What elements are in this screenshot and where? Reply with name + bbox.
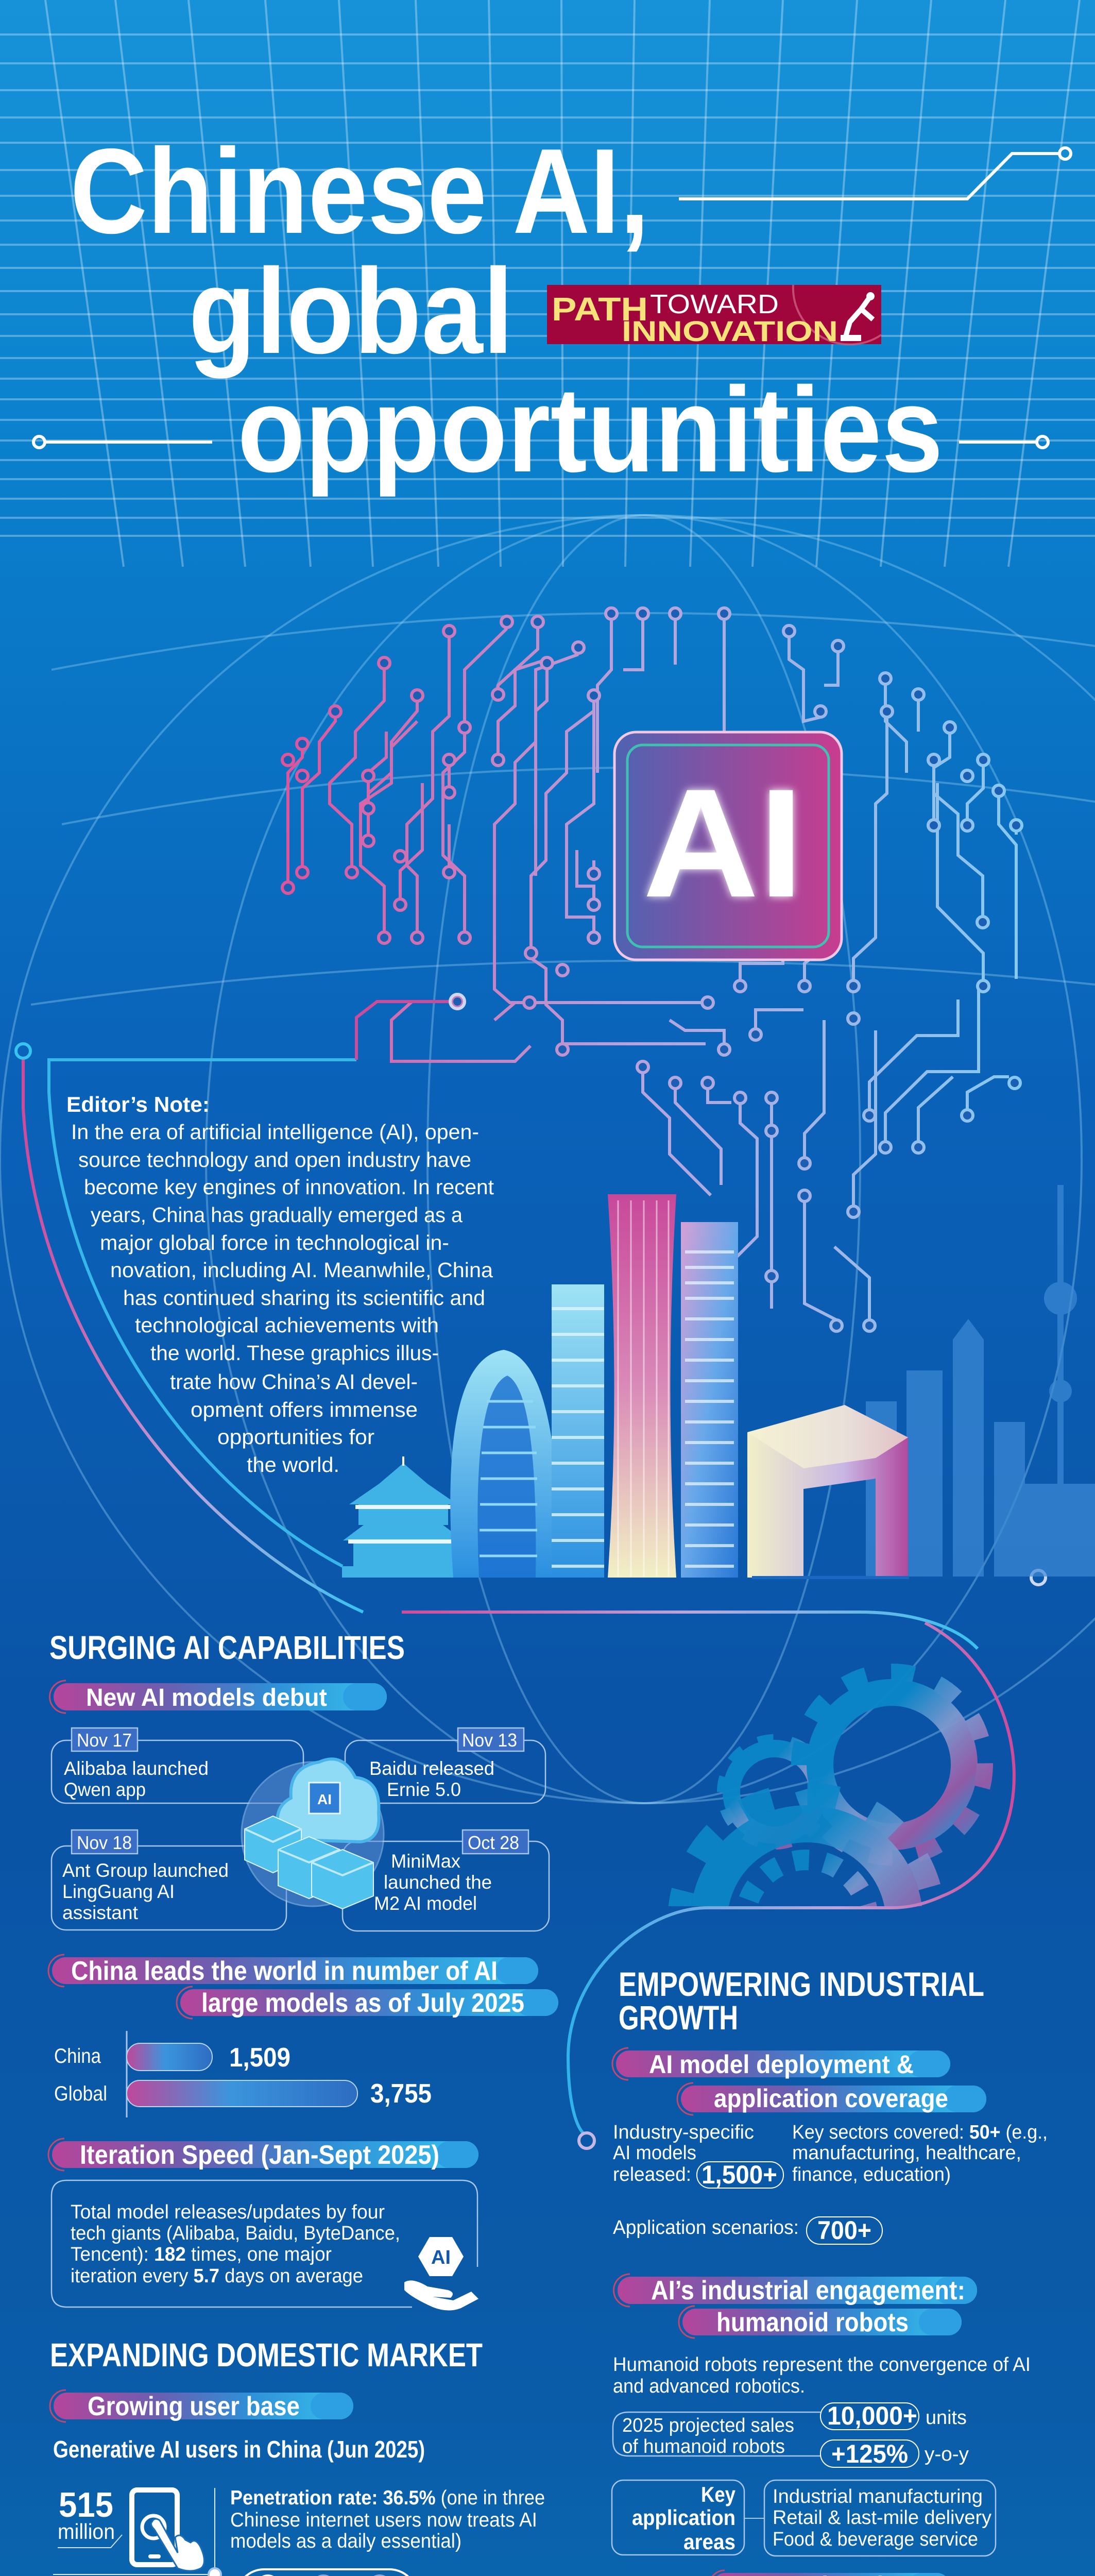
editor's note: major global force in technological in- <box>100 1231 449 1255</box>
pill: AI market size <box>709 2570 950 2576</box>
card: Nov 13 Baidu <box>345 1728 545 1803</box>
editor's note: trate how China’s AI devel- <box>170 1370 418 1394</box>
illustration: AI cloud and servers <box>242 1759 384 1909</box>
stat: penetration rate: Chinese internet users now treats AI <box>230 2509 537 2531</box>
icon: one in three people <box>236 2569 417 2576</box>
key application areas: areas <box>683 2530 735 2554</box>
stat: 2025 projected humanoid robot sales: 2025 projected sales <box>622 2415 794 2436</box>
bar chart: China vs Global large models: Global <box>54 2082 107 2105</box>
editor's note: novation, including AI. Meanwhile, China <box>110 1258 493 1282</box>
key application areas: Food & beverage service <box>773 2529 978 2550</box>
stat: 2025 projected humanoid robot sales <box>613 2401 969 2468</box>
stat: 515 million users <box>58 2485 122 2548</box>
editor's note <box>66 1092 494 1477</box>
stat: industry-specific models: released: <box>613 2164 691 2185</box>
card: Oct 28 MiniMax <box>343 1830 549 1931</box>
card: iteration speed details: Total model releases/updates by four <box>71 2201 385 2223</box>
pill: China leads the world: China leads the world in number of AI <box>71 1956 498 1986</box>
stat: 2025 projected humanoid robot sales: units <box>926 2407 967 2429</box>
stat: industry-specific models: AI models <box>613 2142 696 2164</box>
card: Nov 18 Ant Group: assistant <box>62 1902 139 1923</box>
heading: surging AI capabilities: SURGING AI CAPABILITIES <box>49 1629 405 1666</box>
bar chart: China vs Global large models <box>54 2031 432 2117</box>
pill: iteration speed: Iteration Speed (Jan-Sept 2025) <box>80 2140 439 2170</box>
pill: AI's industrial engagement: AI’s industrial engagement: <box>651 2276 965 2306</box>
editor's note: become key engines of innovation. In recent <box>84 1175 494 1199</box>
pill: growing user base: Growing user base <box>88 2392 300 2421</box>
heading: empowering industrial growth <box>619 1965 984 2037</box>
title <box>70 123 943 497</box>
key application areas: Key <box>701 2482 736 2506</box>
icon: AI in hand: AI <box>431 2247 451 2268</box>
editor's note: source technology and open industry have <box>78 1148 471 1172</box>
key application areas: Retail & last-mile delivery <box>773 2507 991 2529</box>
key application areas <box>612 2480 996 2556</box>
pill: humanoid robots: humanoid robots <box>716 2308 909 2337</box>
AI chip box: AI <box>643 756 803 929</box>
heading: expanding domestic market: EXPANDING DOMESTIC MARKET <box>50 2336 483 2374</box>
icon: AI in hand <box>404 2237 478 2311</box>
title: global <box>189 243 514 379</box>
stat: application scenarios: 700+ <box>817 2216 871 2245</box>
bar chart: China vs Global large models: 1,509 <box>229 2043 290 2073</box>
card: iteration speed details: iteration every 5.7 days on average <box>71 2265 363 2287</box>
stat: key sectors covered: finance, education) <box>792 2164 951 2185</box>
title circuit decorations <box>33 148 1071 448</box>
pill: new AI models debut: New AI models debut <box>86 1684 327 1711</box>
card: Nov 13 Baidu: Nov 13 <box>462 1730 517 1751</box>
stat: application scenarios: Application scenarios: <box>613 2217 799 2239</box>
stat: industry-specific models: 1,500+ <box>702 2160 777 2189</box>
icon: phone touch <box>132 2490 204 2571</box>
key application areas: Industrial manufacturing <box>773 2486 983 2507</box>
subheading: generative AI users: Generative AI users in China (Jun 2025) <box>53 2436 425 2463</box>
card: Nov 13 Baidu: Ernie 5.0 <box>387 1779 461 1800</box>
bar chart: China vs Global large models: China <box>54 2045 101 2067</box>
card: Nov 17 Alibaba: Qwen app <box>64 1779 146 1800</box>
card: Nov 17 Alibaba: Nov 17 <box>77 1730 132 1751</box>
editor's note: has continued sharing its scientific and <box>123 1286 485 1310</box>
editor's note: technological achievements with <box>135 1313 439 1337</box>
editor's note: the world. <box>247 1453 339 1477</box>
card: Nov 13 Baidu: Baidu released <box>369 1758 494 1779</box>
title: Chinese AI, <box>70 123 649 259</box>
stat: industry-specific models <box>613 2122 783 2189</box>
card: Oct 28 MiniMax: M2 AI model <box>374 1893 477 1914</box>
stat: industry-specific models: Industry-specific <box>613 2122 754 2143</box>
card: Nov 18 Ant Group: LingGuang AI <box>62 1881 175 1902</box>
bar chart: China vs Global large models: 3,755 <box>370 2079 432 2109</box>
stat: 2025 projected humanoid robot sales: y-o-y <box>925 2444 969 2465</box>
gears upper right <box>568 1623 1014 2148</box>
card: iteration speed details: Tencent): 182 times, one major <box>71 2244 332 2265</box>
badge: Path Toward Innovation: INNOVATION <box>622 315 838 347</box>
stat: 515 million users: 515 <box>59 2485 113 2524</box>
skyline illustration <box>342 1185 1095 1578</box>
stat: key sectors covered <box>792 2122 1048 2185</box>
card: Nov 18 Ant Group: Ant Group launched <box>62 1860 229 1881</box>
card: Nov 18 Ant Group <box>52 1830 286 1930</box>
stat: 2025 projected humanoid robot sales: 10,000+ <box>827 2401 917 2430</box>
editor's note: years, China has gradually emerged as a <box>91 1203 463 1227</box>
illustration: AI cloud and servers: AI <box>317 1791 332 1807</box>
AI chip box <box>614 732 842 960</box>
card: Nov 17 Alibaba <box>52 1728 303 1803</box>
card: Oct 28 MiniMax: Oct 28 <box>468 1832 519 1853</box>
pill: large models as of July 2025: large models as of July 2025 <box>201 1988 524 2018</box>
connector lines <box>53 2488 266 2576</box>
editor's note: the world. These graphics illus- <box>150 1341 439 1365</box>
card: Nov 17 Alibaba: Alibaba launched <box>64 1758 209 1779</box>
stat: key sectors covered: Key sectors covered: 50+ (e.g., <box>792 2122 1048 2143</box>
key application areas: application <box>632 2505 735 2530</box>
text: humanoid robots description <box>613 2354 1031 2397</box>
card: Oct 28 MiniMax: MiniMax <box>391 1851 460 1872</box>
stat: penetration rate <box>230 2487 545 2552</box>
editor's note: In the era of artificial intelligence (AI), open- <box>71 1120 479 1144</box>
text: humanoid robots description: and advanced robotics. <box>613 2376 805 2397</box>
stat: 515 million users: million <box>58 2519 115 2544</box>
editor's note: opportunities for <box>217 1425 374 1449</box>
stat: 2025 projected humanoid robot sales: of humanoid robots <box>622 2436 785 2458</box>
stat: application scenarios <box>613 2216 882 2245</box>
card: Oct 28 MiniMax: launched the <box>384 1872 492 1893</box>
text: humanoid robots description: Humanoid robots represent the convergence of AI <box>613 2354 1031 2376</box>
stat: key sectors covered: manufacturing, healthcare, <box>792 2142 1021 2164</box>
pill: new AI models debut <box>50 1681 387 1713</box>
pill: application coverage: application coverage <box>714 2084 948 2113</box>
stat: 2025 projected humanoid robot sales: +125% <box>831 2439 908 2468</box>
editor's note: opment offers immense <box>191 1398 418 1421</box>
badge: Path Toward Innovation: PATH <box>552 291 648 328</box>
stat: penetration rate: Penetration rate: 36.5% (one in three <box>230 2487 545 2509</box>
card: iteration speed details: tech giants (Alibaba, Baidu, ByteDance, <box>71 2223 400 2244</box>
heading: empowering industrial growth: GROWTH <box>619 1998 738 2037</box>
editor's note: Editor’s Note: <box>66 1092 210 1116</box>
editor's note frame lines <box>16 994 1046 1649</box>
badge: Path Toward Innovation <box>547 285 881 347</box>
badge: Path Toward Innovation: TOWARD <box>650 290 779 319</box>
card: iteration speed details <box>52 2180 477 2307</box>
heading: empowering industrial growth: EMPOWERING INDUSTRIAL <box>619 1965 984 2003</box>
stat: penetration rate: models as a daily essential) <box>230 2530 461 2552</box>
card: Nov 18 Ant Group: Nov 18 <box>77 1832 132 1853</box>
circuit brain <box>288 619 1016 1320</box>
title: opportunities <box>237 362 943 497</box>
pill: AI model deployment &: AI model deployment & <box>649 2050 914 2079</box>
